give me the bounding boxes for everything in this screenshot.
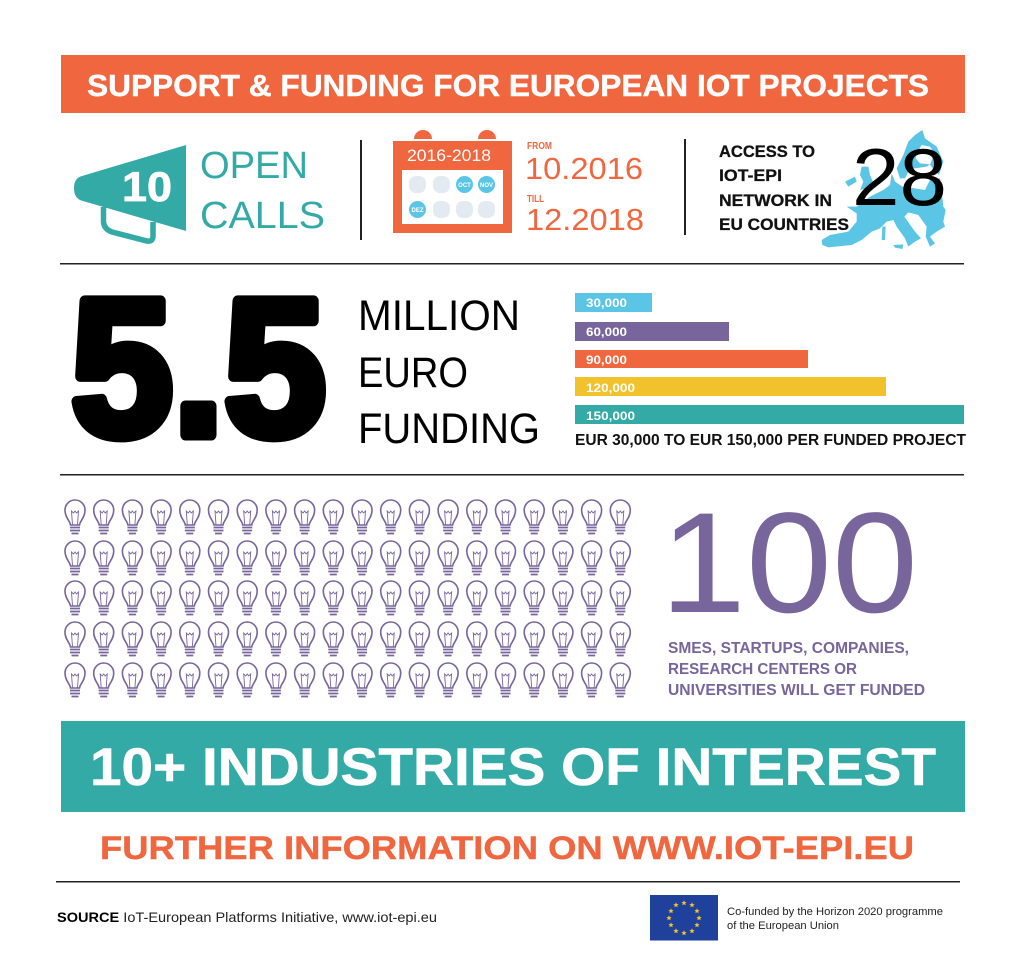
access text <box>719 142 849 234</box>
bar chart: 120,000 <box>586 383 635 395</box>
date range text: 10.2016 <box>525 151 643 186</box>
icon: calendar: 2016-2018 <box>407 146 491 165</box>
funded organisations text: SMES, STARTUPS, COMPANIES, <box>668 640 909 657</box>
access text: NETWORK IN <box>719 191 832 210</box>
panel: EU network <box>719 130 947 249</box>
bar chart caption: EUR 30,000 TO EUR 150,000 PER FUNDED PROJECT <box>575 432 966 449</box>
co-funding note <box>727 906 943 932</box>
icon: calendar: NOV <box>480 183 493 189</box>
bar chart: 90,000 <box>586 355 627 367</box>
icon: calendar: OCT <box>458 183 471 189</box>
funded organisations text: RESEARCH CENTERS OR <box>668 661 857 678</box>
funded organisations text <box>668 640 925 699</box>
co-funding note: of the European Union <box>727 920 839 932</box>
icon: EU flag <box>650 895 718 940</box>
date range text <box>525 141 644 237</box>
icon: calendar <box>393 130 512 233</box>
panel: open calls <box>74 145 325 241</box>
icon: megaphone <box>74 145 186 241</box>
million euro funding label: FUNDING <box>358 405 540 453</box>
date range text: 12.2018 <box>526 202 644 237</box>
industries heading: 10+ INDUSTRIES OF INTEREST <box>90 738 936 797</box>
access text: EU COUNTRIES <box>719 215 849 234</box>
megaphone number: 10 <box>122 163 172 210</box>
bar chart <box>575 293 966 449</box>
icon: calendar: DEZ <box>412 208 424 214</box>
big number 5.5: 5.5 <box>71 259 326 477</box>
funded organisations text: UNIVERSITIES WILL GET FUNDED <box>668 682 925 699</box>
bar chart: 150,000 <box>586 411 635 423</box>
bar chart: 60,000 <box>586 327 627 339</box>
open calls label: CALLS <box>200 195 325 237</box>
co-funding note: Co-funded by the Horizon 2020 programme <box>727 906 943 918</box>
million euro funding label <box>358 292 540 453</box>
panel: dates <box>393 130 644 237</box>
date range text: TILL <box>527 194 544 205</box>
header banner <box>61 55 965 113</box>
source line: SOURCE IoT-European Platforms Initiative, www.iot-epi.eu <box>57 909 437 925</box>
big number 100: 100 <box>660 484 918 643</box>
header title: SUPPORT & FUNDING FOR EUROPEAN IOT PROJECTS <box>87 68 929 103</box>
million euro funding label: MILLION <box>358 292 520 340</box>
bar chart: 30,000 <box>586 298 627 310</box>
million euro funding label: EURO <box>358 349 468 397</box>
open calls label <box>200 145 325 237</box>
date range text: FROM <box>527 141 552 152</box>
number 28: 28 <box>852 133 947 223</box>
access text: IOT-EPI <box>719 166 782 185</box>
industries banner <box>61 721 965 812</box>
open calls label: OPEN <box>200 145 308 187</box>
access text: ACCESS TO <box>719 142 815 161</box>
icon grid: light bulbs <box>65 500 630 696</box>
further information link: FURTHER INFORMATION ON WWW.IOT-EPI.EU <box>100 830 914 866</box>
icon: map of Europe <box>822 130 946 249</box>
